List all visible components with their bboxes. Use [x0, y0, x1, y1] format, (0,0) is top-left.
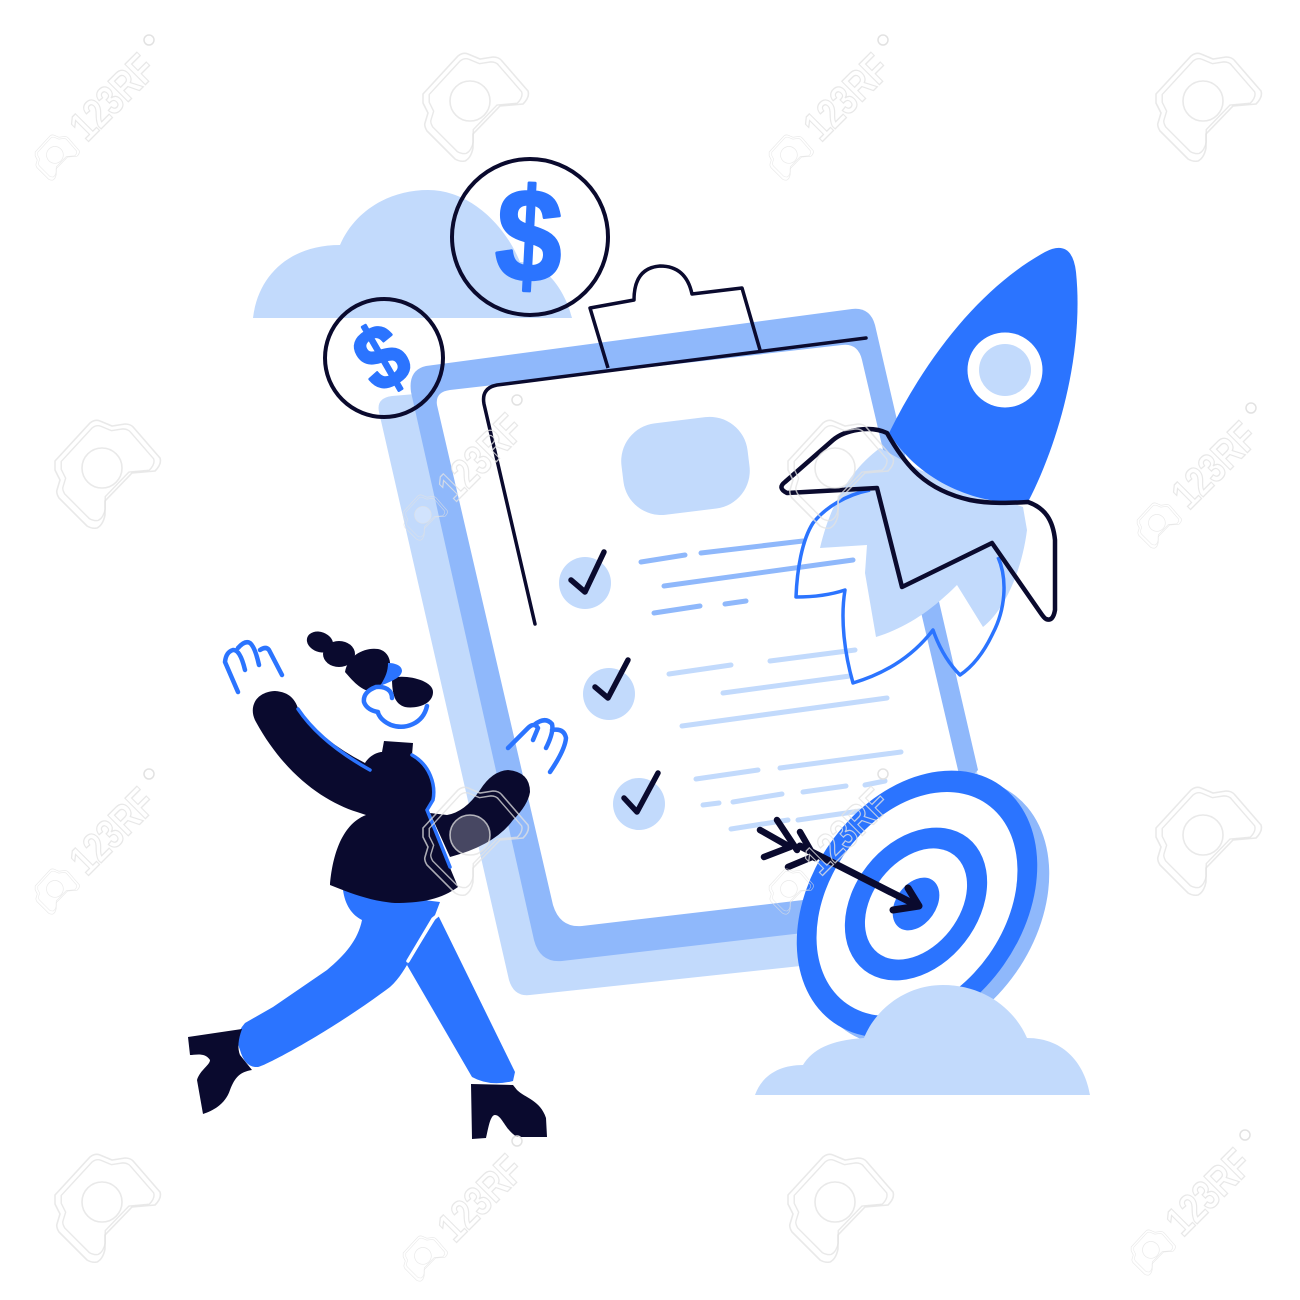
clipboard back layer	[379, 370, 985, 995]
watermarks: 123RF	[429, 1147, 533, 1251]
watermarks: 123RF	[1163, 414, 1267, 518]
right arm	[430, 770, 530, 857]
coin: large dollar: $	[492, 160, 566, 311]
rocket window	[968, 332, 1042, 408]
watermarks: 123RF	[61, 780, 165, 884]
pants gap	[408, 915, 438, 961]
head outline	[364, 687, 427, 727]
clipboard clip	[590, 266, 760, 368]
target rings	[747, 724, 1087, 1084]
cloud: top left	[253, 190, 572, 318]
hair	[304, 628, 433, 707]
watermarks: 123RF	[1157, 1141, 1261, 1245]
clipboard	[379, 266, 985, 995]
rocket body	[889, 248, 1078, 503]
sweater trim	[298, 709, 450, 867]
person	[188, 628, 566, 1139]
hair band	[380, 663, 402, 686]
text lines 1	[641, 541, 853, 613]
target shadow	[759, 732, 1099, 1092]
check item 2	[583, 660, 635, 720]
target	[747, 724, 1099, 1092]
check item 1	[559, 552, 611, 609]
left hand	[225, 642, 282, 692]
watermarks: 123RF	[795, 780, 899, 884]
cloud: bottom right	[755, 985, 1090, 1095]
rocket flame outline	[796, 490, 1004, 683]
right boot	[471, 1084, 547, 1139]
check item 3	[613, 773, 665, 830]
text lines 3	[696, 752, 901, 829]
clipboard paper	[437, 345, 965, 926]
coin: large dollar	[452, 159, 608, 315]
arrow	[760, 820, 919, 910]
rocket fins outline	[781, 429, 1055, 620]
watermarks: 123RF	[795, 46, 899, 150]
clipboard middle layer	[411, 309, 978, 961]
right hand	[508, 720, 566, 772]
header placeholder	[617, 413, 754, 519]
left boot	[188, 1029, 252, 1114]
text lines 2	[669, 650, 887, 726]
coin: small dollar: $	[337, 303, 426, 413]
rocket flame fill	[820, 448, 1027, 637]
watermarks: 123RF	[429, 406, 533, 510]
pants	[238, 890, 515, 1083]
rocket	[781, 248, 1078, 683]
torso and left arm	[253, 691, 458, 903]
clipboard outline	[484, 338, 866, 624]
watermarks: 123RF	[61, 46, 165, 150]
